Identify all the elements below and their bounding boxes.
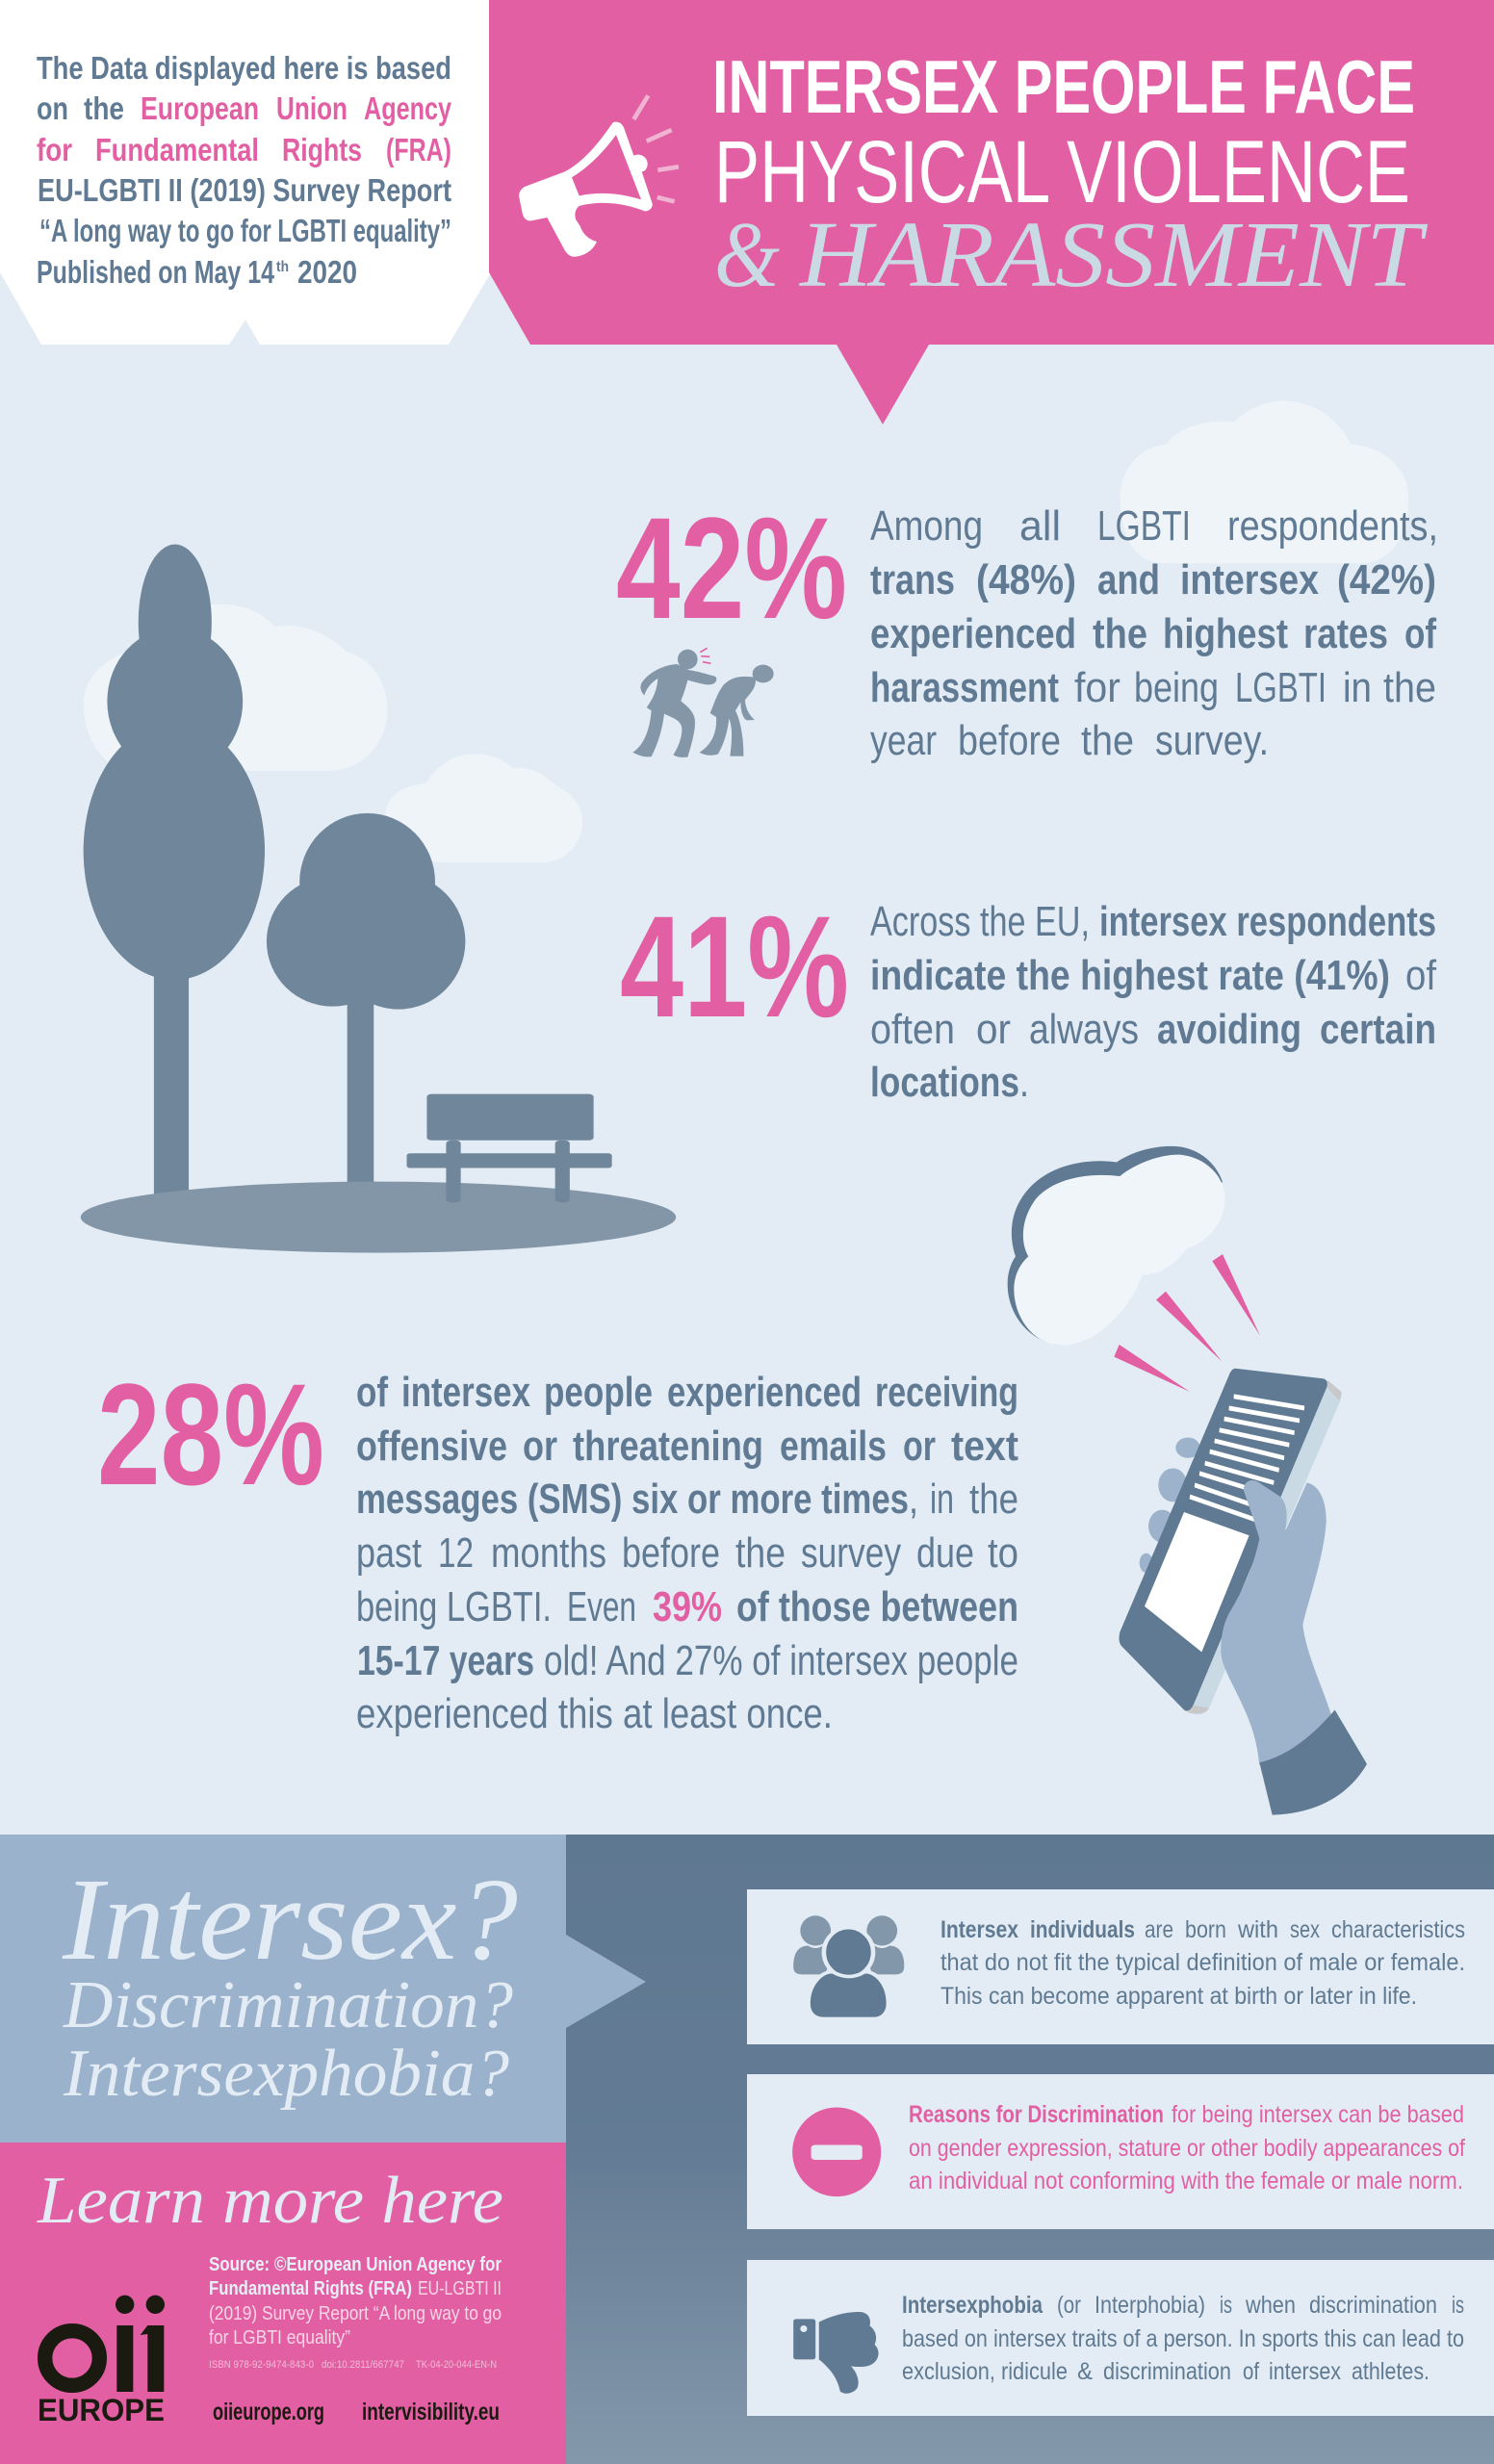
illustration: hand holding phone with message cloud [1008, 1146, 1367, 1815]
text: data source description: the [84, 90, 124, 126]
text: data source description: EU-LGBTI II (2019) Survey Report [38, 172, 451, 208]
panel: reasons for discrimination definition [747, 2074, 1494, 2229]
text: intersexphobia: Intersexphobia [902, 2292, 1043, 2319]
heading: intersexphobia question: Intersexphobia? [63, 2037, 509, 2111]
text: 28 percent description: old! And 27% of intersex people [544, 1637, 1018, 1684]
text: data source description: Published on May 14 [37, 254, 274, 290]
text: intersex individuals: with [1237, 1916, 1278, 1943]
text: 42 percent description: for [1074, 664, 1120, 711]
text: 28 percent description: experienced this at least once. [356, 1690, 833, 1737]
text: source citation: (2019) Survey Report “A long way to go [209, 2303, 502, 2324]
text: 28 percent description: text [951, 1423, 1018, 1470]
text: 28 percent description: experienced [667, 1369, 862, 1416]
text: 28 percent description: messages (SMS) six or more times [356, 1476, 909, 1523]
text: intersex individuals: are [1145, 1916, 1173, 1943]
text: intersex individuals: This can become apparent at birth or later in life. [940, 1983, 1417, 2010]
text: 41 percent description: always [1029, 1006, 1139, 1053]
text: data source description: th [276, 259, 289, 275]
text: 42 percent description: intersex [1180, 556, 1319, 603]
text: 42 percent description [870, 502, 1438, 764]
text: intersex individuals [940, 1916, 1465, 2010]
text: 42 percent description: harassment [870, 664, 1059, 711]
text: source citation: Fundamental Rights (FRA) [209, 2278, 412, 2299]
text: 41 percent description: locations [870, 1059, 1019, 1106]
text: 28 percent description: past [356, 1529, 422, 1577]
text: 28 percent description: 39% [653, 1583, 722, 1630]
panel: title speech bubble [489, 0, 1494, 424]
text: 28 percent description: before [622, 1529, 720, 1577]
icon: group of people [793, 1915, 904, 2018]
text: 28 percent description: the [969, 1476, 1018, 1523]
icon: one person pushing another [632, 648, 774, 757]
text: 42 percent description: (48%) [976, 556, 1076, 603]
text: intersexphobia: is [1220, 2292, 1232, 2319]
text: 42 percent description: being [1134, 664, 1219, 711]
text: 28 percent description: threatening [573, 1423, 763, 1470]
icon: thumbs down [793, 2312, 879, 2394]
text: 28 percent description: being LGBTI. [356, 1583, 552, 1630]
text: 42 percent description: in [1343, 664, 1372, 711]
text: intersex individuals: born [1185, 1916, 1226, 1943]
text: 28 percent description: or [523, 1423, 557, 1470]
text: source citation: TK-04-20-044-EN-N [416, 2359, 497, 2371]
panel: learn more and source [0, 2143, 566, 2464]
text: intersexphobia: of [1243, 2358, 1259, 2385]
text: 28 percent description: the [735, 1529, 786, 1577]
text: reasons for discrimination [909, 2101, 1465, 2194]
panel: definitions background [566, 1835, 1494, 2464]
text: 42 percent description: and [1097, 556, 1160, 603]
heading: and harassment: HARASSMENT [798, 203, 1428, 306]
text: data source description [37, 50, 451, 290]
text: 41 percent description [870, 898, 1437, 1106]
text: data source description: The Data displayed here is based [37, 50, 451, 86]
text: 41 percent description: indicate the highest rate (41%) [870, 952, 1390, 999]
text: intersex individuals: individuals [1030, 1916, 1135, 1943]
number: 42%: 42% [616, 487, 847, 649]
text: intersexphobia [902, 2292, 1464, 2385]
text: 42 percent description: trans [870, 556, 955, 603]
text: 28 percent description: months [491, 1529, 606, 1577]
text: 28 percent description: of those between [736, 1583, 1018, 1630]
text: intersex individuals: sex [1290, 1916, 1320, 1943]
link: intervisibility.eu: intervisibility.eu [362, 2399, 500, 2426]
text: intersex individuals: Intersex [940, 1916, 1018, 1943]
text: 28 percent description: due [916, 1529, 974, 1577]
text: 28 percent description: intersex [401, 1369, 530, 1416]
panel: data source note [0, 0, 491, 345]
text: 42 percent description: all [1019, 502, 1061, 550]
statistic: 42 percent harassment [616, 487, 1438, 764]
text: 42 percent description: Among [870, 502, 983, 550]
text: intersexphobia: is [1452, 2292, 1464, 2319]
text: 28 percent description: to [988, 1529, 1018, 1577]
text: intersexphobia: intersex [1269, 2358, 1341, 2385]
text: 41 percent description: certain [1320, 1006, 1436, 1053]
text: 28 percent description: of [356, 1369, 388, 1416]
text: 28 percent description: people [544, 1369, 653, 1416]
number: 28%: 28% [97, 1353, 324, 1515]
icon: megaphone [519, 95, 679, 257]
statistic: 41 percent avoiding locations [620, 886, 1437, 1106]
text: 28 percent description: survey [801, 1529, 901, 1577]
text: data source description: Fundamental [95, 132, 259, 167]
text: 41 percent description: of [1405, 952, 1437, 999]
text: 41 percent description: avoiding [1157, 1006, 1301, 1053]
text: 28 percent description: or [903, 1423, 936, 1470]
number: 41%: 41% [620, 886, 849, 1047]
text: 42 percent description: LGBTI [1235, 664, 1327, 711]
text: source citation: doi:10.2811/667747 [322, 2359, 404, 2371]
text: 28 percent description [356, 1369, 1018, 1737]
text: intersexphobia: discrimination [1103, 2358, 1231, 2385]
text: 42 percent description: experienced [870, 610, 1076, 657]
text: 42 percent description: year [870, 717, 937, 764]
text: intersex individuals: that do not fit the typical definition of male or female. [940, 1949, 1465, 1976]
text: 42 percent description: of [1404, 610, 1436, 657]
text: 42 percent description: before [958, 717, 1061, 764]
text: 28 percent description: in [930, 1476, 954, 1523]
panel: intersexphobia definition [747, 2260, 1494, 2416]
text: data source description: 2020 [297, 254, 357, 290]
text: data source description: on [37, 90, 68, 126]
text: 42 percent description: (42%) [1337, 556, 1436, 603]
panel: questions with arrow [0, 1835, 646, 2143]
text: source citation [209, 2254, 502, 2371]
statistic: 28 percent offensive messages [97, 1353, 1018, 1737]
text: data source description: for [37, 132, 72, 167]
text: intersexphobia: when [1245, 2292, 1296, 2319]
heading: discrimination question: Discrimination? [63, 1968, 513, 2042]
text: intersexphobia: exclusion, ridicule [902, 2358, 1068, 2385]
illustration: park scene with trees, clouds and bench [81, 400, 1408, 1253]
panel: intersex individuals definition [747, 1889, 1494, 2044]
text: 41 percent description: Across the EU, [870, 898, 1090, 945]
text: 41 percent description: or [976, 1006, 1011, 1053]
text: 42 percent description: the [1383, 664, 1436, 711]
text: 28 percent description: Even [567, 1583, 636, 1630]
heading: intersex question: Intersex? [62, 1855, 518, 1985]
text: 42 percent description: the [1081, 717, 1134, 764]
text: data source description: European [141, 90, 259, 126]
icon: minus sign circle [792, 2108, 881, 2196]
text: intersex individuals: characteristics [1331, 1916, 1465, 1943]
text: data source description: (FRA) [386, 132, 451, 167]
text: intersexphobia: athletes. [1352, 2358, 1430, 2385]
text: source citation: EU-LGBTI II [418, 2278, 502, 2299]
text: 42 percent description: LGBTI [1097, 502, 1191, 550]
heading: learn more here: Learn more here [37, 2164, 503, 2238]
text: 28 percent description: , [909, 1476, 918, 1523]
text: 42 percent description: survey. [1155, 717, 1269, 764]
text: source citation: ISBN 978-92-9474-843-0 [209, 2359, 314, 2371]
text: intersexphobia: Interphobia) [1095, 2292, 1205, 2319]
text: 41 percent description: . [1019, 1059, 1029, 1106]
text: 42 percent description: respondents, [1227, 502, 1438, 550]
text: data source description: Agency [364, 90, 451, 126]
text: 42 percent description: highest [1163, 610, 1288, 657]
text: data source description: Union [276, 90, 348, 126]
logo: OII Europe: EUROPE [38, 2393, 165, 2427]
text: data source description: “A long way to go for LGBTI equality” [39, 213, 451, 248]
text: reasons for discrimination: Reasons for Discrimination [909, 2101, 1164, 2128]
text: 41 percent description: often [870, 1006, 955, 1053]
text: source citation: Source: ©European Union Agency for [209, 2254, 502, 2275]
text: intersexphobia: & [1077, 2358, 1093, 2385]
text: 28 percent description: receiving [875, 1369, 1018, 1416]
heading: and harassment: & [714, 203, 780, 306]
text: 28 percent description: 12 [438, 1529, 474, 1577]
link: oiieurope.org: oiieurope.org [213, 2399, 324, 2426]
text: intersexphobia: discrimination [1309, 2292, 1437, 2319]
text: data source description: Rights [282, 132, 362, 167]
logo: OII Europe [38, 2296, 165, 2427]
text: 28 percent description: offensive [356, 1423, 507, 1470]
text: 28 percent description: emails [780, 1423, 887, 1470]
text: 28 percent description: 15-17 years [357, 1637, 534, 1684]
text: 42 percent description: rates [1303, 610, 1388, 657]
text: source citation: for LGBTI equality” [209, 2327, 350, 2348]
text: intersexphobia: (or [1057, 2292, 1081, 2319]
text: 42 percent description: the [1093, 610, 1147, 657]
